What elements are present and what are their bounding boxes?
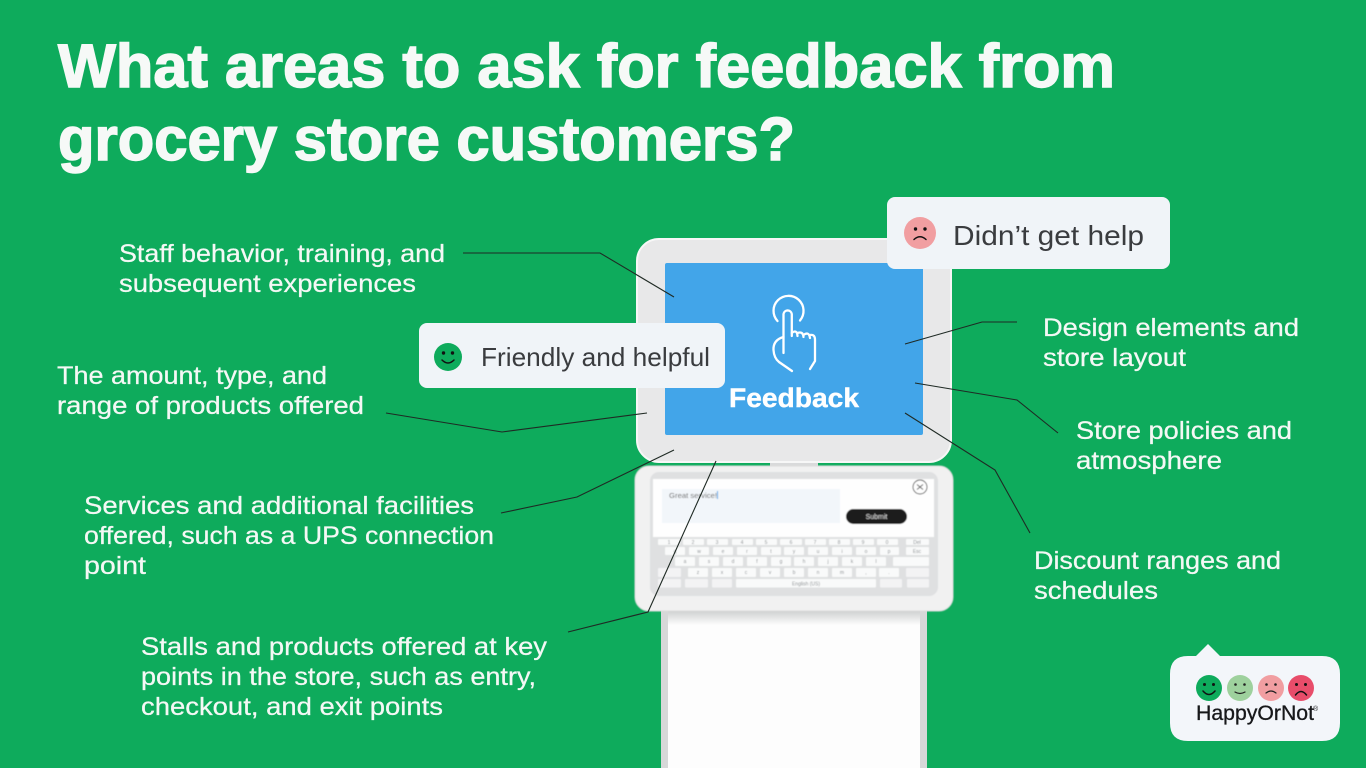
on-screen keys: 4 xyxy=(741,540,744,546)
on-screen keys: . xyxy=(888,570,890,576)
logo face: very happy xyxy=(1196,675,1222,701)
logo: HappyOrNot xyxy=(1170,644,1340,741)
on-screen keys: d xyxy=(732,559,735,565)
label: discounts: Discount ranges and xyxy=(1034,547,1281,575)
label: services: point xyxy=(84,552,146,580)
on-screen keys: 1 xyxy=(668,540,671,546)
callout: friendly and helpful xyxy=(419,323,725,388)
on-screen keys: v xyxy=(769,570,772,576)
on-screen keys: x xyxy=(721,570,724,576)
feedback screen frame xyxy=(637,239,951,462)
on-screen keys: 8 xyxy=(838,540,841,546)
label: products: range of products offered xyxy=(57,392,364,420)
on-screen keys: 9 xyxy=(862,540,865,546)
label: staff behavior: Staff behavior, training, and xyxy=(119,240,445,268)
submit button xyxy=(846,509,907,524)
callout: friendly and helpful: Friendly and helpful xyxy=(481,342,710,372)
on-screen keys: o xyxy=(865,549,868,555)
label: stalls xyxy=(141,633,548,721)
logo face: unhappy xyxy=(1258,675,1284,701)
logo wordmark: ® xyxy=(1313,705,1319,713)
label: store policies: Store policies and xyxy=(1076,417,1292,445)
on-screen keys: p xyxy=(888,549,891,555)
label: design: Design elements and xyxy=(1043,314,1299,342)
connector: products xyxy=(386,413,647,432)
on-screen keys: h xyxy=(803,559,806,565)
on-screen keys: 5 xyxy=(765,540,768,546)
hinge xyxy=(770,459,818,468)
connector: design xyxy=(905,322,1017,344)
label: stalls: checkout, and exit points xyxy=(141,693,443,721)
icon: happy face xyxy=(434,343,462,371)
title: grocery store customers? xyxy=(58,105,795,173)
label: products xyxy=(57,362,364,420)
callout: didn't get help xyxy=(887,197,1170,269)
label: discounts xyxy=(1034,547,1281,605)
close icon xyxy=(913,480,927,494)
connector: staff behavior xyxy=(463,253,674,297)
label: store policies: atmosphere xyxy=(1076,447,1222,475)
label: staff behavior: subsequent experiences xyxy=(119,270,416,298)
on-screen keys: t xyxy=(770,549,772,555)
on-screen keys xyxy=(658,539,929,588)
callout: didn't get help: Didn’t get help xyxy=(953,220,1144,251)
kiosk stand xyxy=(661,606,927,768)
on-screen keys: r xyxy=(746,549,748,555)
on-screen keys: u xyxy=(817,549,820,555)
submit button: Submit xyxy=(866,514,887,521)
keyboard tablet xyxy=(635,466,953,611)
logo face: happy xyxy=(1227,675,1253,701)
icon: tapping hand xyxy=(773,296,815,371)
connector: services xyxy=(501,450,674,513)
title: What areas to ask for feedback from xyxy=(58,32,1115,100)
label: stalls: points in the store, such as entry, xyxy=(141,663,536,691)
on-screen keys: Del xyxy=(913,540,921,546)
blue screen xyxy=(665,263,923,435)
on-screen keys: 2 xyxy=(692,540,695,546)
on-screen keys: b xyxy=(793,570,796,576)
on-screen keys: y xyxy=(793,549,796,555)
on-screen keys: l xyxy=(875,559,877,565)
on-screen keys: z xyxy=(697,570,700,576)
on-screen keys: s xyxy=(708,559,711,565)
on-screen keys: 3 xyxy=(716,540,719,546)
on-screen keys: k xyxy=(851,559,854,565)
on-screen keys: c xyxy=(745,570,748,576)
on-screen keys: , xyxy=(865,570,867,576)
connector: stalls xyxy=(568,461,716,632)
label: design xyxy=(1043,314,1299,372)
text entry box: Great service! xyxy=(669,491,717,500)
on-screen keys: f xyxy=(756,559,758,565)
connector: discounts xyxy=(905,413,1030,533)
on-screen keys: e xyxy=(722,549,725,555)
on-screen keys: i xyxy=(841,549,843,555)
label: staff behavior xyxy=(119,240,445,298)
on-screen keys: m xyxy=(840,570,844,576)
connector: store policies xyxy=(915,383,1058,433)
on-screen keys: n xyxy=(817,570,820,576)
title xyxy=(58,32,1115,173)
on-screen keys: 7 xyxy=(814,540,817,546)
on-screen keys: 6 xyxy=(790,540,793,546)
label: store policies xyxy=(1076,417,1292,475)
on-screen keys: g xyxy=(780,559,783,565)
on-screen keys: w xyxy=(697,549,701,555)
label: services: Services and additional facilities xyxy=(84,492,474,520)
label: discounts: schedules xyxy=(1034,577,1158,605)
on-screen keys: 0 xyxy=(886,540,889,546)
on-screen keys: q xyxy=(674,549,677,555)
on-screen keys: Esc xyxy=(913,549,922,555)
logo wordmark: HappyOrNot xyxy=(1196,702,1314,725)
on-screen keys: English (US) xyxy=(792,582,820,588)
icon: sad face xyxy=(904,217,936,249)
text entry box xyxy=(662,489,840,523)
feedback label: Feedback xyxy=(729,383,860,413)
label: services xyxy=(84,492,494,580)
label: stalls: Stalls and products offered at key xyxy=(141,633,548,661)
logo face: very unhappy xyxy=(1288,675,1314,701)
on-screen keys: a xyxy=(684,559,687,565)
label: services: offered, such as a UPS connection xyxy=(84,522,494,550)
label: products: The amount, type, and xyxy=(57,362,327,390)
label: design: store layout xyxy=(1043,344,1186,372)
kiosk device xyxy=(635,239,953,768)
on-screen keys: j xyxy=(826,559,829,565)
